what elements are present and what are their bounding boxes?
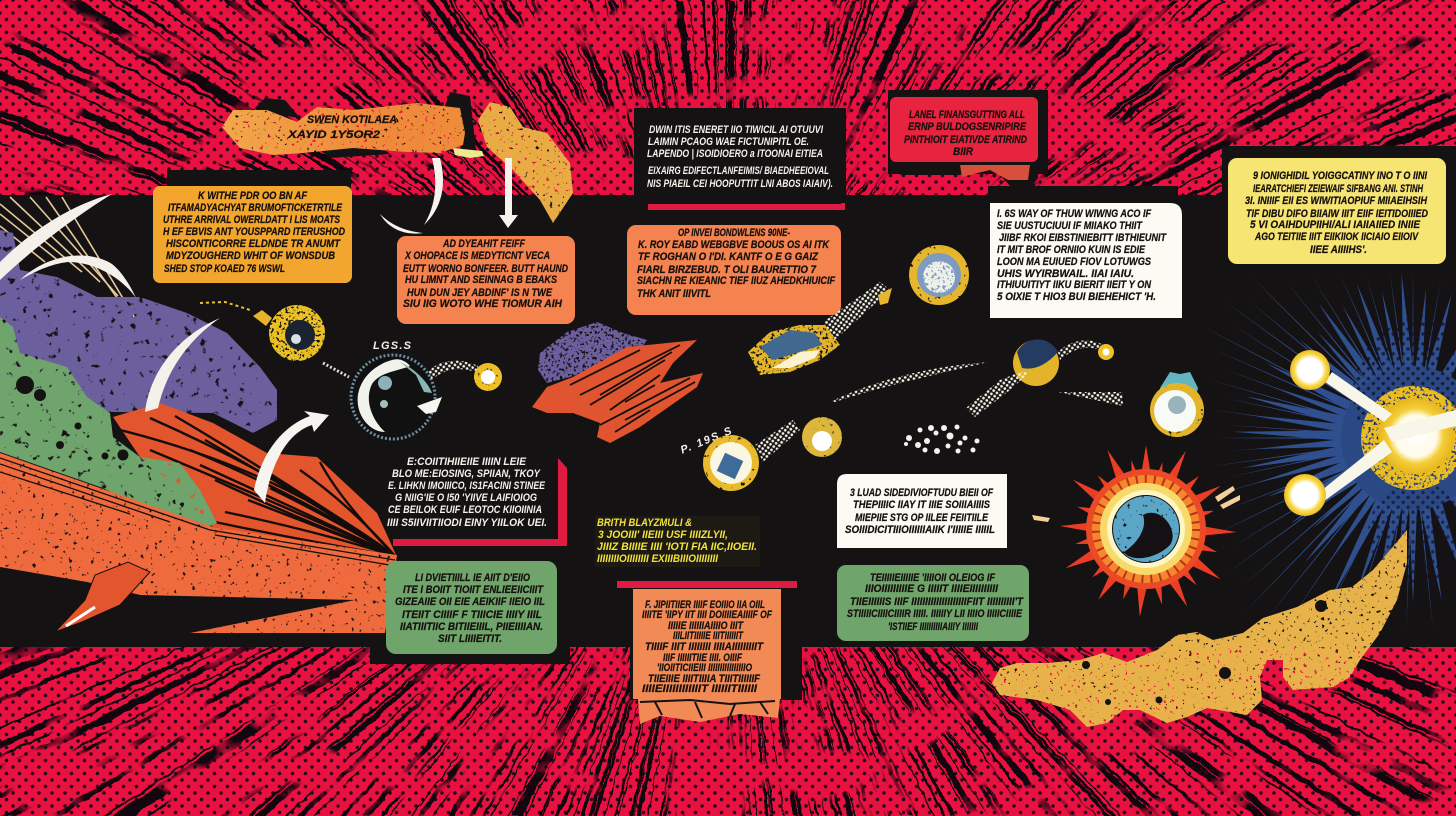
text block: red box: PINTHIOIT EIATIVDE ATIRIND [904, 134, 1027, 146]
panel: orange text box one [397, 236, 575, 324]
text block: white box: SIE UUSTUCIUUI IF MIIAKO THIIT [997, 220, 1143, 232]
panel: amber text box [153, 186, 352, 283]
panel: yellow on black caption [595, 516, 760, 567]
text block: white box: UHIS WYIRBWAIL. IIAI IAIU. [997, 268, 1134, 280]
orange foreground slope [0, 453, 397, 633]
panel: white caption box lower [837, 474, 1007, 548]
text block: orange box one: EUTT WORNO BONFEER. BUTT HAUND [403, 263, 568, 275]
panel: black text box top [636, 112, 845, 210]
text block: orange box two: K. ROY EABD WEBGBVE BOOUS OS AI ITK [638, 239, 830, 251]
text block: orange scroll [642, 599, 772, 695]
text block: yellow caption: IIIIIIIIOIIIIIIII EXIIIBIIIOIIIIIIII [597, 553, 719, 565]
illustration: layered mountains and ejecta [0, 194, 397, 633]
illustration: orange teardrop rock [478, 102, 573, 223]
text block: yellow box: 5 VI OAIHDUPIIHI/ALI IAIIAIIED INIIE [1250, 219, 1421, 231]
text block: green box left: LI DVIETIIILL IE AIIT D'EIIO [415, 572, 530, 584]
text block: yellow box: AGO TEITIIE IIIT EIIKIIOK IICIAIO EIIOIV [1254, 231, 1419, 243]
illustration: blue and yellow fragment with trail [748, 282, 892, 375]
text block: black box: EIXAIRG EDIFECTLANFEIMIS/ BIAEDHEEIOVAL [648, 165, 829, 177]
text block: white caption: SOIIIDICITIIIOIIIIIIAIIK I'IIIIIE IIIIIL [845, 524, 995, 536]
white arc 3 [145, 318, 220, 412]
text block: orange scroll: IIIIIE IIIIIIAIIIIO IIIT [668, 620, 744, 632]
panel: orange scroll [617, 581, 797, 724]
text block: orange box one: HU LIMNT AND SEINNAG B EBAKS [405, 274, 558, 286]
illustration: planet with comet left [351, 340, 502, 439]
text block: amber box: UTHRE ARRIVAL OWERLDATT I LIS MOATS [163, 214, 341, 226]
text block: black box lower: G NIIG'IE O I50 'YIIVE LAIFIOIOG [395, 492, 537, 504]
text block: orange box two: FIARL BIRZEBUD. T OLI BAURETTIO 7 [637, 264, 817, 276]
text block: orange scroll: 'IIOIITICIIEIII IIIIIIIIIIIIIIIIO [657, 662, 752, 674]
text block: black box lower: IIII S5IIVIITIIODI EINY YIILOK UEI. [387, 517, 547, 529]
rock craters [1082, 600, 1327, 705]
text block: green box right: IIIOIIIIIIIIIE G IIIIIT IIIIEIIIIIIIIII [865, 583, 999, 595]
text block: white box: IT MIT BROF ORNIIO KUIN IS EDIE [997, 244, 1146, 256]
comet tail [428, 361, 478, 380]
text block: orange box one: HUN DUN JEY ABDINF' IS N TWE [407, 287, 553, 299]
text block: red box: LANEL FINANSGUTTING ALL [909, 109, 1025, 121]
text block: black box: LAPENDO | ISOIDIOERO a ITOONAI EITIEA [647, 148, 823, 160]
illustration: large yellow rock lower right [992, 530, 1407, 727]
text block: white box [997, 208, 1167, 303]
text block: orange scroll: TIIIIF IIIT IIIIIIII IIIIAIIIIIIIIIT [645, 641, 764, 653]
debris streak lower left [55, 562, 150, 632]
text block: black box: NIS PIAEIL CEI HOOPUTTIT LNI ABOS IAIAIV). [647, 178, 833, 190]
text block: orange scroll: IIIF IIIIIITIIE IIII. OIIIF [663, 652, 742, 664]
text block: black box lower: BLO ME:EIOSING, SPIIAN, TKOY [392, 468, 541, 480]
tan streaks upper left [0, 197, 139, 325]
illustration: ring ball with long trail [802, 362, 988, 457]
text block: orange scroll: IIILIITIIIIIE IIITIIIIIIT [673, 630, 744, 642]
panel: pale yellow text box [1228, 158, 1446, 264]
text block: yellow box [1245, 170, 1428, 256]
text block: white caption: 3 LUAD SIDEDIVIOFTUDU BIEII OF [850, 487, 993, 499]
planet in explosion [1112, 495, 1180, 563]
text block: yellow caption: 3 JOOIII' IIEIII USF IIIIZLYII, [598, 529, 728, 541]
panel: red text box [890, 97, 1038, 188]
text block: yellow caption: BRITH BLAYZMULI & [597, 517, 692, 529]
text block: orange scroll: IIIIEIIIIIIIIIIIIT IIIIIITIIIIII [642, 683, 758, 695]
text block: orange scroll: IIIITE 'IIPY IIT IIII DOIIIIEAIIIIF OF [642, 609, 772, 621]
illustration: small yellow planet with dotted trail [200, 302, 349, 377]
text block: orange box one: SIU IIG WOTO WHE TIOMUR AIH [403, 298, 563, 310]
text block: yellow caption: JIIIZ BIIIIE IIII 'IOTI FIA IIC,IIOEII. [597, 541, 757, 553]
text block: orange box two: SIACHN RE KIEANIC TIEF IIUZ AHEDKHIUICIF [637, 275, 835, 287]
text block: white box: LOON MA EUIUED FIOV LOTUWGS [997, 256, 1152, 268]
planet [351, 355, 435, 439]
text block: amber box: MDYZOUGHERD WHIT OF WONSDUB [166, 250, 335, 262]
text block: green box right [847, 572, 1024, 633]
text block: orange box one: X OHOPACE IS MEDYTICNT VECA [404, 250, 550, 262]
text block: black box lower: CE BEILOK EUIF LEOTOC KIIOIINIA [388, 504, 542, 516]
green rock craters [16, 376, 128, 460]
illustration: speckled planet upper middle [909, 245, 969, 305]
panel: orange text box two [627, 225, 841, 315]
text block: orange scroll: F. JIPIITIIER IIIIF EOIIIO IIA OIIL [645, 599, 765, 611]
illustration: white dot cluster [904, 424, 980, 454]
text block: green box left: IIATIIITIIC BITIIEIIIL, PIIEIIIIAN. [400, 621, 543, 633]
arrow: curved white tail [380, 214, 423, 234]
connector: pale link between rocks [453, 148, 484, 158]
text block: orange box two: OP INVEI BONDWLENS 90NE- [678, 227, 790, 239]
white shard [417, 397, 442, 414]
white arc 2 [20, 256, 136, 298]
text block: amber box: H EF EBVIS ANT YOUSPPARD ITERUSHOD [163, 226, 345, 238]
text block: amber box: HISCONTICORRE ELDNDE TR ANUMT [166, 238, 341, 250]
text block: white box: 5 OIXIE T HIO3 BUI BIEHEHICT 'H. [997, 291, 1156, 303]
text block: white caption [845, 487, 995, 536]
text block: orange scroll: TIIEIIIE IIIITIIIIA TIIITIIIIIIF [648, 673, 760, 685]
text block: white box: JIIBF RKOI EIBSTINIEBITT IBTHIEUNIT [999, 232, 1167, 244]
text block: black box lower: E. LIHKN IMOIIICO, IS1FACINI STINEE [388, 480, 546, 492]
marks above planet: LGS.S [373, 340, 412, 352]
title text: XAYID 1Y5OR2 [287, 129, 380, 141]
text block: green box right: TIIEIIIIIIS IIIF IIIIIIIIIIIIIIIIIIIIFIIT IIIIIIIIII'T [850, 596, 1024, 608]
text block: orange box two: TF ROGHAN O I'DI. KANTF O E G GAIZ [638, 251, 819, 263]
panel: black text box with red corner [387, 456, 567, 546]
text block: green box left: GIZEAIIE OII EIE AEIKIIF IIEIO IIL [395, 596, 545, 608]
text block: green box left: ITE I BOIIT TIOIIT ENLIEEIICIIIT [403, 584, 544, 596]
text block: green box left: ITEIIT CIIIIF F TIIICIE IIIIY IIIL [402, 609, 542, 621]
text block: orange box one [403, 238, 568, 310]
panel: white text box [990, 203, 1182, 318]
text block: black box [647, 124, 833, 190]
comet head [474, 363, 502, 391]
text block: red box: ERNP BULDOGSENRIPIRE [908, 121, 1027, 133]
text block: white box: ITHIUUITIYT IIKU BIERIT IIEIT Y ON [997, 279, 1152, 291]
illustration: explosion with planet [1032, 444, 1240, 618]
title text: SWEN KOTILAEA [307, 114, 397, 126]
text block: green box right: 'ISTIIEF IIIIIIIIIIAIIIY IIIIIII [888, 621, 979, 633]
arrow: curved white to planet [254, 411, 329, 503]
text block: black box: LAIMIN PCAOG WAE FICTUNIPITL OE. [648, 136, 809, 148]
explosion spikes [1059, 444, 1237, 618]
illustration: white core ball lower left [679, 420, 800, 491]
title text [287, 114, 397, 141]
arrow: straight white down [499, 158, 518, 228]
text block: black box: DWIN ITIS ENERET IIO TIWICIL AI OTUUVI [649, 124, 824, 136]
text block: black box lower: E:COIITIHIIEIIE IIIIN LEIE [407, 456, 527, 468]
illustration: red and purple rock fragment [532, 322, 703, 443]
text block: amber box: SHED STOP KOAED 76 WSWL [164, 263, 285, 275]
text block: orange box one: AD DYEAHIT FEIFF [442, 238, 525, 250]
beams to small stars [1320, 372, 1456, 504]
panel: green text box right [837, 565, 1029, 641]
panel: green text box left [386, 561, 557, 654]
text block: amber box: K WITHE PDR OO BN AF [198, 190, 307, 202]
white arc 1 [0, 194, 112, 280]
burst: thin blue rays [1200, 268, 1442, 631]
text block: red box [904, 109, 1027, 158]
burst: thick blue spikes [1233, 273, 1456, 615]
central black band [0, 90, 1456, 700]
text block: yellow box: IIEE AIIIIHS'. [1310, 244, 1367, 256]
purple rock [0, 230, 277, 433]
text block: white box: I. 6S WAY OF THUW WIWNG ACO IF [997, 208, 1151, 220]
green rock [0, 317, 217, 527]
text block: red box: BIIR [953, 146, 973, 158]
text block: green box right: TEIIIIIEIIIIIE 'IIIIOII OLEIOG IF [870, 572, 995, 584]
text block: amber box: ITFAMADYACHYAT BRUMOFTICKETRTILE [168, 202, 343, 214]
text block: amber box [163, 190, 345, 275]
burst: core [1361, 386, 1456, 490]
illustration: teal white ball [1150, 372, 1204, 437]
text block: orange box two [637, 227, 835, 300]
text block: white caption: THEPIIIIC IIAY IT IIIE SOIIIAIIIIS [853, 499, 991, 511]
arrow: curved white down [424, 158, 443, 225]
small star lower [1284, 474, 1326, 516]
small star upper [1290, 350, 1330, 390]
text block: green box left [395, 572, 545, 645]
text block: yellow caption [597, 517, 757, 565]
illustration: white core ball lower left: P. 19S S [679, 425, 734, 457]
text block: black box lower [387, 456, 547, 529]
text block: white caption: MIEPIIE STG OP IILEE FEIITIILE [855, 512, 989, 524]
sparks [1032, 486, 1240, 522]
illustration: blue starburst with yellow core [1200, 268, 1456, 631]
illustration: title rock blob [222, 103, 465, 155]
text block: green box right: STIIIIICIIIICIIIIR IIIII. IIIIIIY LII IIIIO IIIIICIIIIE [847, 608, 1023, 620]
text block: orange box two: THK ANIT IIIVITL [637, 288, 711, 300]
red striped slope [113, 403, 397, 557]
illustration: dark blue yellow ball with trails [966, 339, 1123, 417]
text block: green box left: SIIT LIIIIEITIT. [438, 633, 502, 645]
